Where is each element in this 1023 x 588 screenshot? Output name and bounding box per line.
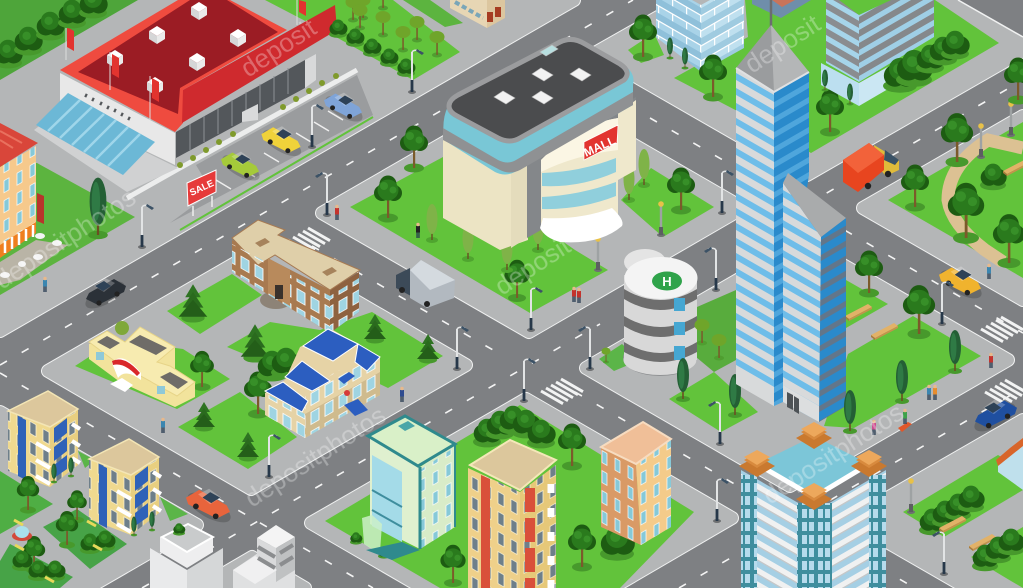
blue car: [970, 398, 1020, 437]
building: cafe with red roof: [0, 123, 68, 285]
building: supermarket small shop: [89, 321, 195, 407]
black car: [81, 276, 129, 314]
delivery truck white: [396, 260, 455, 308]
building: yellow apartments B: [89, 439, 161, 535]
pedestrians: [161, 264, 993, 435]
building: tall red-yellow apartments: [468, 440, 556, 588]
park trees and benches: [845, 250, 962, 404]
watermarks: deposit: [489, 230, 576, 301]
watermarks: depositphotos: [239, 400, 391, 513]
building: mall: [443, 37, 636, 250]
watermarks: [0, 8, 909, 513]
orange car: [183, 487, 235, 528]
parked cars: [219, 91, 366, 186]
building: school: [232, 220, 360, 333]
mall sign: MALL: [582, 133, 618, 160]
tower foot shadows and trees: [843, 390, 857, 434]
park path: [948, 140, 1023, 262]
trees: behind supermarket: [0, 0, 444, 77]
mall roof units: [494, 45, 591, 104]
sale sign: SALE: [188, 178, 216, 199]
building: far right striped tower: [821, 0, 934, 106]
building: teal glass block: [362, 416, 455, 560]
building: helipad parking tower: [623, 249, 698, 376]
school grounds trees: [179, 284, 439, 462]
small block behind tower: [752, 0, 811, 18]
top right road corner: [958, 0, 1023, 37]
roof caps: [739, 422, 887, 510]
trees near glass office: [629, 14, 1023, 136]
crosswalks: [288, 228, 1023, 405]
building: yellow apartments A: [8, 391, 80, 487]
bottom centre trees: [350, 406, 635, 587]
truck: red delivery: [843, 143, 899, 192]
building: peach block: [601, 422, 671, 545]
sale sign: [187, 170, 216, 216]
building: skyscraper main: [736, 0, 846, 422]
store planters: [177, 73, 339, 168]
watermarks: deposit: [739, 8, 826, 79]
building: hospital: [265, 329, 380, 438]
bottom right park: [919, 438, 1023, 576]
parking lot: [127, 70, 373, 230]
icon: left cypress and lamps near store: [43, 178, 154, 292]
trees: mall block: [335, 126, 695, 302]
building: glass office at top: [656, 0, 744, 72]
scooter rider: [898, 409, 912, 432]
building: white blocks at bottom: [150, 523, 295, 588]
helipad marking: H: [662, 274, 672, 289]
bottom left park details: [12, 458, 155, 582]
building: top brick block: [450, 0, 505, 28]
roof vents: [107, 2, 246, 95]
watermarks: depositphotos: [757, 397, 909, 510]
roadside lamps and traffic light: [265, 49, 1015, 514]
building: red supermarket: [34, 0, 337, 216]
watermarks: deposit: [235, 12, 322, 83]
shrubs by parking tower: [602, 319, 742, 523]
flags: [66, 0, 306, 120]
park trees: [901, 113, 1023, 268]
building: corner tower with orange caps: [739, 422, 887, 588]
hedges on right block: [883, 31, 970, 93]
taxi: [936, 265, 986, 304]
